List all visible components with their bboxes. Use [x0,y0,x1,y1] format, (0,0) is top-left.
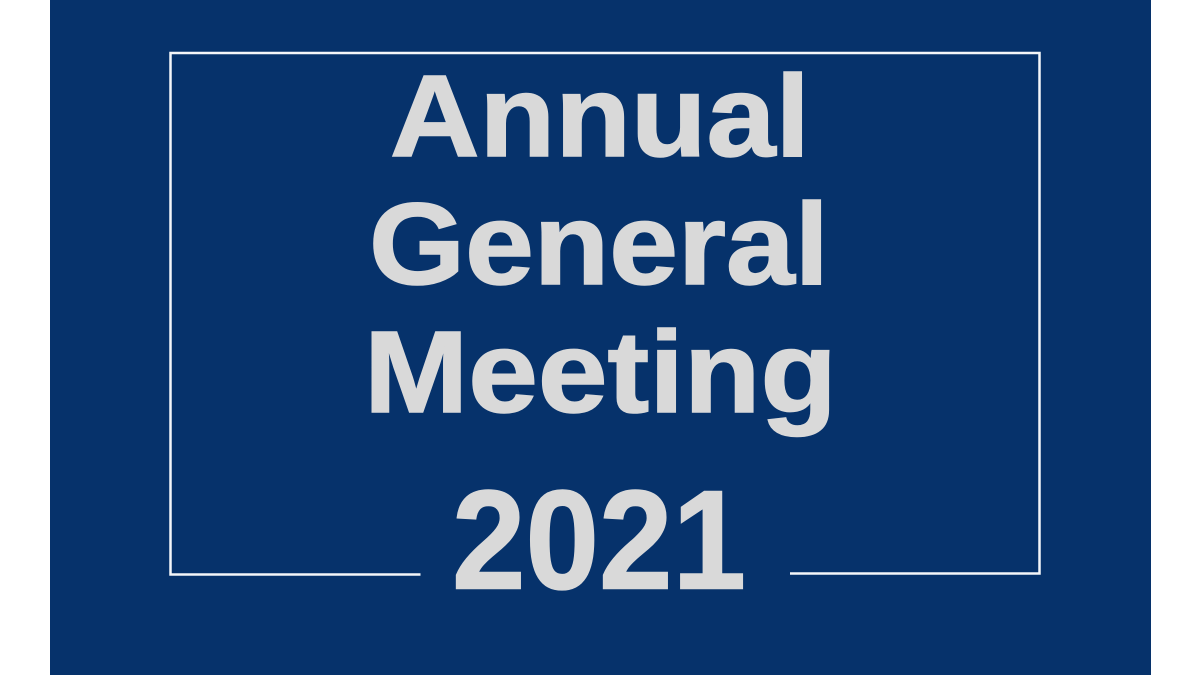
title: Annual General Meeting: Meeting [364,307,837,437]
frame: white outline with gap at the bottom [170,53,1040,574]
title: Annual General Meeting: Annual [390,51,810,181]
year: 2021: 2021 [452,460,746,618]
title: Annual General Meeting [364,51,837,437]
title: Annual General Meeting: General [369,179,829,309]
